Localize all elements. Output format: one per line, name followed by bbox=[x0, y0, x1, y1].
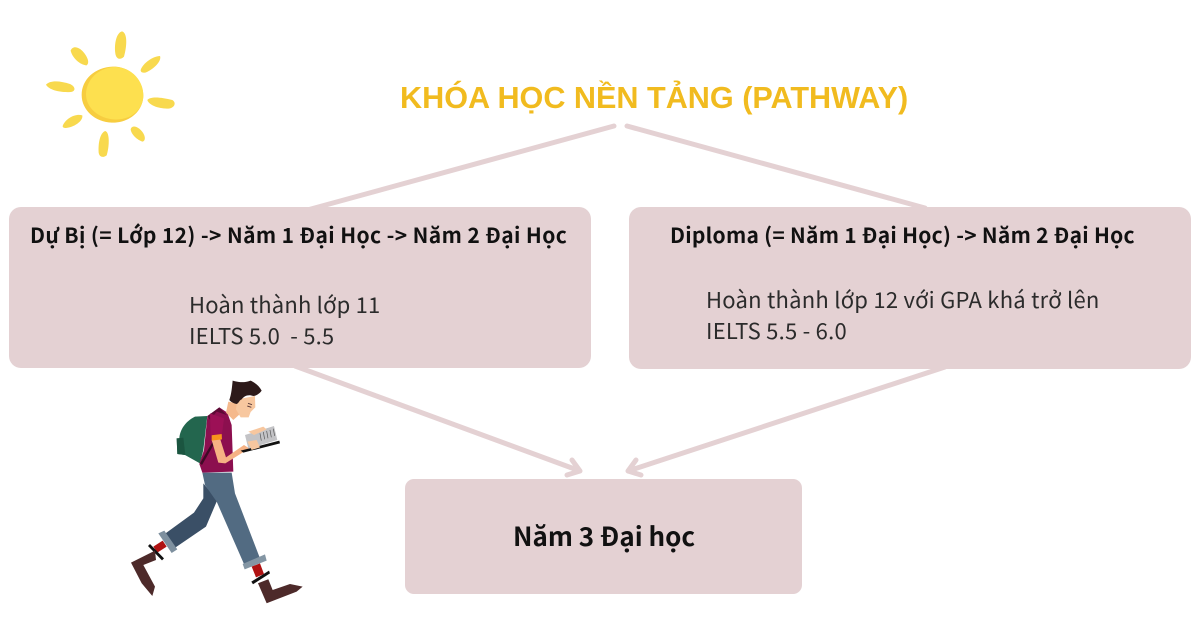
backpack bbox=[177, 416, 207, 463]
text: diploma requirements bbox=[706, 283, 1100, 346]
arrow: diploma box to final box bbox=[628, 367, 945, 475]
text: diploma requirements: IELTS 5.5 - 6.0 bbox=[706, 314, 847, 346]
torso bbox=[199, 407, 233, 473]
text: diploma requirements: Hoàn thành lớp 12 với GPA khá trở lên bbox=[706, 283, 1100, 315]
arrow: title to diploma box bbox=[627, 126, 925, 208]
title: KHÓA HỌC NỀN TẢNG (PATHWAY) bbox=[400, 81, 908, 115]
arrow: preparatory box to final box bbox=[295, 366, 580, 475]
neck and head bbox=[226, 402, 241, 420]
panel: final year bbox=[405, 479, 802, 594]
heading: third university year: Năm 3 Đại học bbox=[513, 517, 695, 554]
arm holding book bbox=[212, 438, 249, 463]
back leg bbox=[165, 483, 217, 549]
heading: diploma route: Diploma (= Năm 1 Đại Học) -> Năm 2 Đại Học bbox=[670, 220, 1135, 250]
heading: preparatory route: Dự Bị (= Lớp 12) -> Năm 1 Đại Học -> Năm 2 Đại Học bbox=[30, 220, 567, 250]
text: preparatory requirements: IELTS 5.0 - 5.5 bbox=[189, 319, 334, 351]
book bbox=[241, 441, 280, 453]
panel: diploma pathway bbox=[629, 207, 1191, 369]
front leg bbox=[202, 473, 260, 564]
text: preparatory requirements bbox=[189, 288, 380, 351]
text: preparatory requirements: Hoàn thành lớp 11 bbox=[189, 288, 380, 320]
arrow: title to preparatory box bbox=[300, 126, 614, 212]
panel: preparatory pathway bbox=[9, 207, 591, 368]
